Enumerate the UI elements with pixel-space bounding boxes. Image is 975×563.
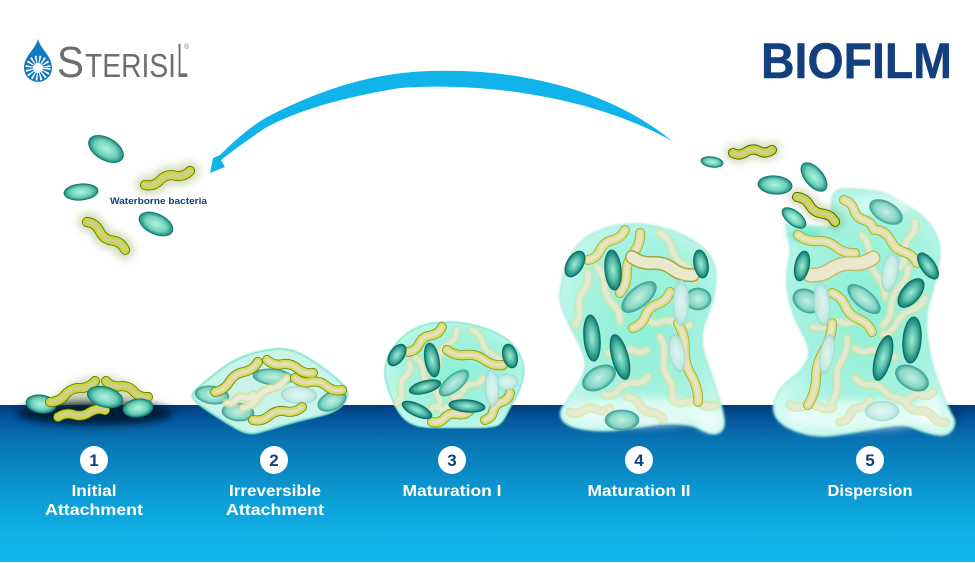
biofilm blob: [560, 224, 724, 434]
soft highlights and turquoise notch: [785, 196, 942, 430]
logo wordmark: S: [57, 38, 84, 87]
step 1 badge and label: Initial: [72, 483, 116, 500]
cell: left: [25, 393, 57, 415]
step 2 badge and label: Irreversible: [229, 483, 321, 500]
step 4 badge and label: 4: [634, 451, 644, 470]
step 2 badge and label: 2: [269, 451, 279, 470]
rods: [397, 327, 510, 422]
logo: Sterisil: ®: [184, 43, 190, 51]
rods: [50, 381, 148, 417]
step 3 badge and label: 3: [447, 451, 457, 470]
glow around rods: [48, 376, 150, 405]
rods: [570, 230, 715, 420]
stage 2: irreversible attachment: [192, 349, 349, 433]
step 4 badge and label: [588, 446, 690, 500]
contact shadow: [17, 401, 173, 425]
step 1 badge and label: [45, 446, 143, 519]
label: waterborne bacteria: Waterborne bacteria: [110, 196, 208, 206]
cells: [384, 341, 520, 422]
biofilm blob: [774, 189, 954, 436]
step 2 badge and label: [226, 446, 324, 519]
logo: Sterisil: [24, 35, 190, 88]
bacteria: free rods: [87, 171, 190, 250]
waterborne bacteria group: [63, 130, 208, 250]
title: BIOFILM: BIOFILM: [761, 33, 952, 89]
text: L: [177, 35, 188, 88]
surface: blue gradient band: [0, 405, 975, 562]
arrow: dispersal back to waterborne bacteria: [210, 71, 672, 173]
step 3 badge and label: [402, 446, 502, 500]
stage 4: maturation II: [560, 224, 724, 434]
bacteria: free cells: [63, 130, 177, 241]
step 3 badge and label: Maturation I: [402, 483, 502, 500]
step 1 badge and label: 1: [89, 451, 99, 470]
dispersing rods: [733, 149, 835, 222]
step 5 badge and label: [828, 446, 912, 500]
stage 5: dispersion: [700, 149, 959, 436]
step 4 badge and label: Maturation II: [588, 483, 690, 500]
background: white upper area: [0, 0, 975, 405]
stage 3: maturation I: [384, 322, 524, 428]
rods: [215, 360, 342, 420]
cells: centre and right: [85, 383, 154, 419]
cells: [194, 367, 349, 422]
dispersing cells: [700, 156, 832, 232]
rods inside biofilm: [790, 200, 945, 422]
biofilm blob: [385, 322, 524, 428]
step 1 badge and label: Attachment: [45, 502, 143, 519]
step 5 badge and label: 5: [865, 451, 875, 470]
cells inside biofilm: [789, 194, 942, 421]
soft white inner highlights: [570, 397, 720, 430]
step 2 badge and label: Attachment: [226, 502, 324, 519]
step 5 badge and label: Dispersion: [828, 483, 912, 500]
biofilm blob: [192, 349, 348, 433]
logo: Sterisil: TERISI: [85, 47, 176, 84]
stage 1: initial attachment: [17, 376, 173, 425]
icon: water drop with sunburst: [24, 39, 52, 82]
surface shadow at base: [931, 408, 959, 424]
cells: [561, 248, 711, 430]
thick rod: [810, 258, 873, 275]
thick rod: [632, 257, 693, 275]
